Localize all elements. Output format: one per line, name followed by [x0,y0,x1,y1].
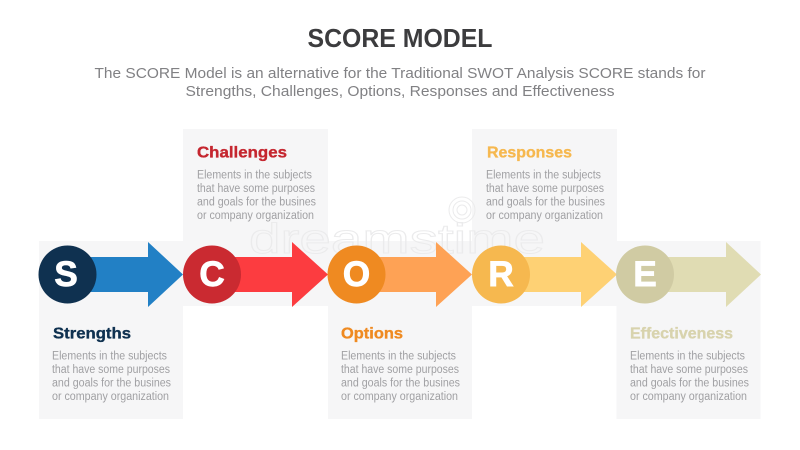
text: strengths description [52,350,171,403]
text: responses description: that have some purposes [486,183,604,195]
text: challenges description: that have some purposes [197,183,315,195]
text: options description: that have some purposes [341,364,459,376]
text: strengths description: Elements in the subjects [52,350,167,362]
icon: O circle [328,246,386,304]
text: effectiveness description [630,350,749,403]
heading: responses: Responses [487,144,572,162]
text: options description: or company organization [341,391,458,403]
subtitle: The SCORE Model is an alternative for the Traditional SWOT Analysis SCORE stands for [94,66,706,82]
arrow: effectiveness [658,242,761,307]
text: responses description: Elements in the subjects [486,170,601,182]
arrow: responses [514,242,617,307]
watermark [249,197,545,262]
heading: options: Options [341,326,403,342]
panel: options [328,241,472,419]
icon: E circle [616,246,674,304]
text: strengths description: that have some purposes [52,364,170,376]
text: effectiveness description: that have some purposes [630,364,748,376]
text: strengths description: and goals for the busines [52,378,171,390]
icon: R circle: R [488,255,514,294]
text: responses description: or company organization [486,210,603,222]
text: responses description [486,170,605,222]
panel: effectiveness [616,241,760,419]
text: challenges description: or company organization [197,210,314,222]
text: responses description: and goals for the busines [486,196,605,208]
icon: O circle: O [343,255,370,294]
heading: strengths: Strengths [53,326,131,342]
text: effectiveness description: Elements in the subjects [630,350,745,362]
panel: strengths [39,241,183,419]
icon: C circle [183,246,241,304]
text: effectiveness description: and goals for the busines [630,378,749,390]
text: options description: Elements in the subjects [341,350,456,362]
text: challenges description: Elements in the subjects [197,170,312,182]
text: options description: and goals for the busines [341,378,460,390]
watermark emblem [449,197,475,223]
arrow: options [370,242,472,307]
panel: responses [472,129,617,306]
subtitle [94,66,706,100]
icon: S circle: S [54,255,78,294]
text: challenges description: and goals for the busines [197,196,316,208]
text: options description [341,350,460,403]
heading: challenges: Challenges [197,144,287,162]
panel: challenges [183,129,328,306]
watermark: dreamstime [249,215,545,262]
text: strengths description: or company organization [52,391,169,403]
icon: E circle: E [633,255,657,294]
icon: C circle: C [199,255,225,294]
arrow: strengths [80,242,183,307]
icon: S circle [38,246,96,304]
icon: R circle [472,246,530,304]
arrow: challenges [225,242,328,307]
text: challenges description [197,170,316,222]
subtitle: Strengths, Challenges, Options, Responses and Effectiveness [186,84,614,100]
title: SCORE MODEL [308,23,493,53]
text: effectiveness description: or company organization [630,391,747,403]
heading: effectiveness: Effectiveness [630,326,733,342]
